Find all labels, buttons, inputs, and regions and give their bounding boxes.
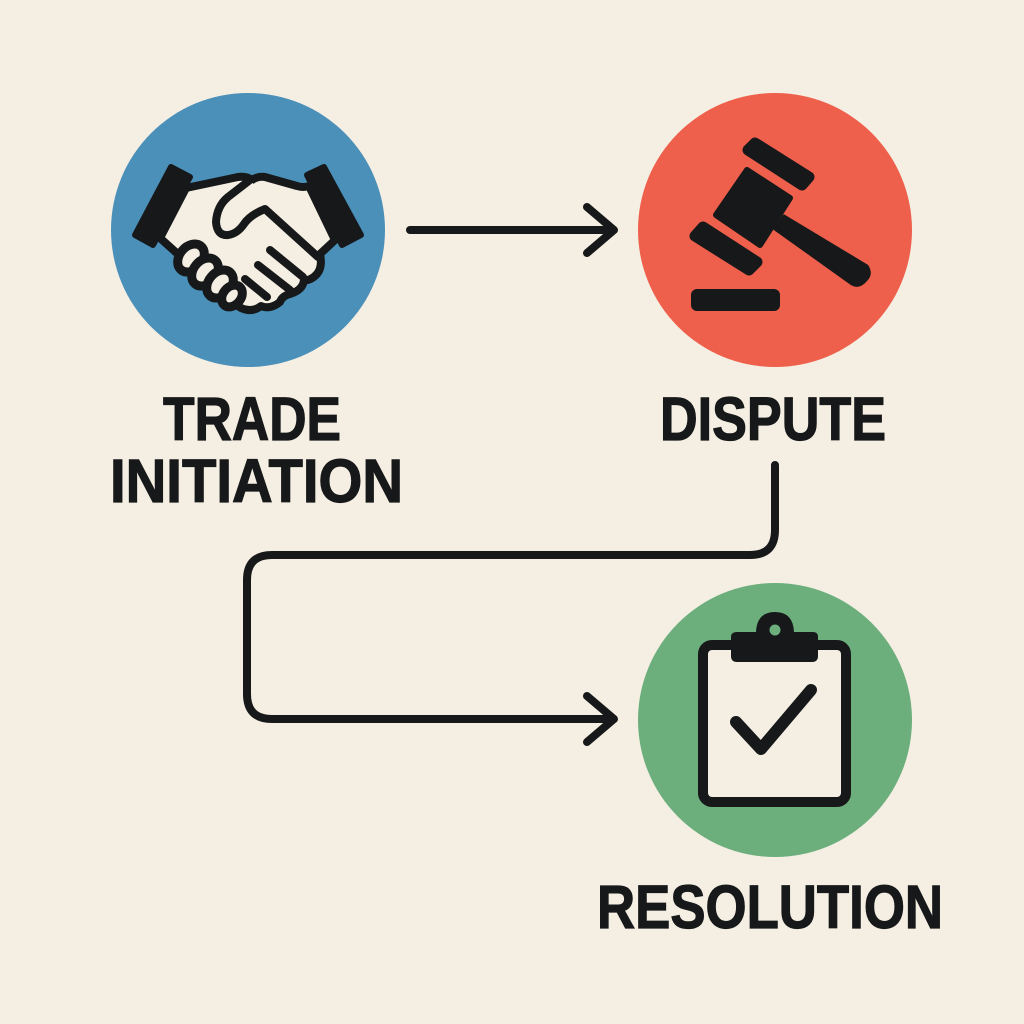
label: trade initiation xyxy=(110,385,403,515)
label: dispute: DISPUTE xyxy=(660,385,886,453)
icon: clipboard with checkmark xyxy=(703,612,846,802)
circle: blue xyxy=(111,93,385,367)
cuffs xyxy=(135,167,190,245)
circle: green xyxy=(638,583,912,857)
label: trade initiation: INITIATION xyxy=(110,447,403,515)
circle: red xyxy=(638,93,912,367)
step: dispute xyxy=(638,93,912,453)
gripping fingers xyxy=(172,239,247,311)
icon: gavel xyxy=(691,143,869,311)
arrow: trade to dispute xyxy=(410,207,614,253)
step: trade initiation xyxy=(110,93,403,515)
step: resolution xyxy=(597,583,943,941)
label: trade initiation: TRADE xyxy=(163,385,341,453)
connector arrow: dispute to resolution xyxy=(247,465,775,742)
label: resolution: RESOLUTION xyxy=(597,873,943,941)
icon: handshake xyxy=(135,167,361,311)
